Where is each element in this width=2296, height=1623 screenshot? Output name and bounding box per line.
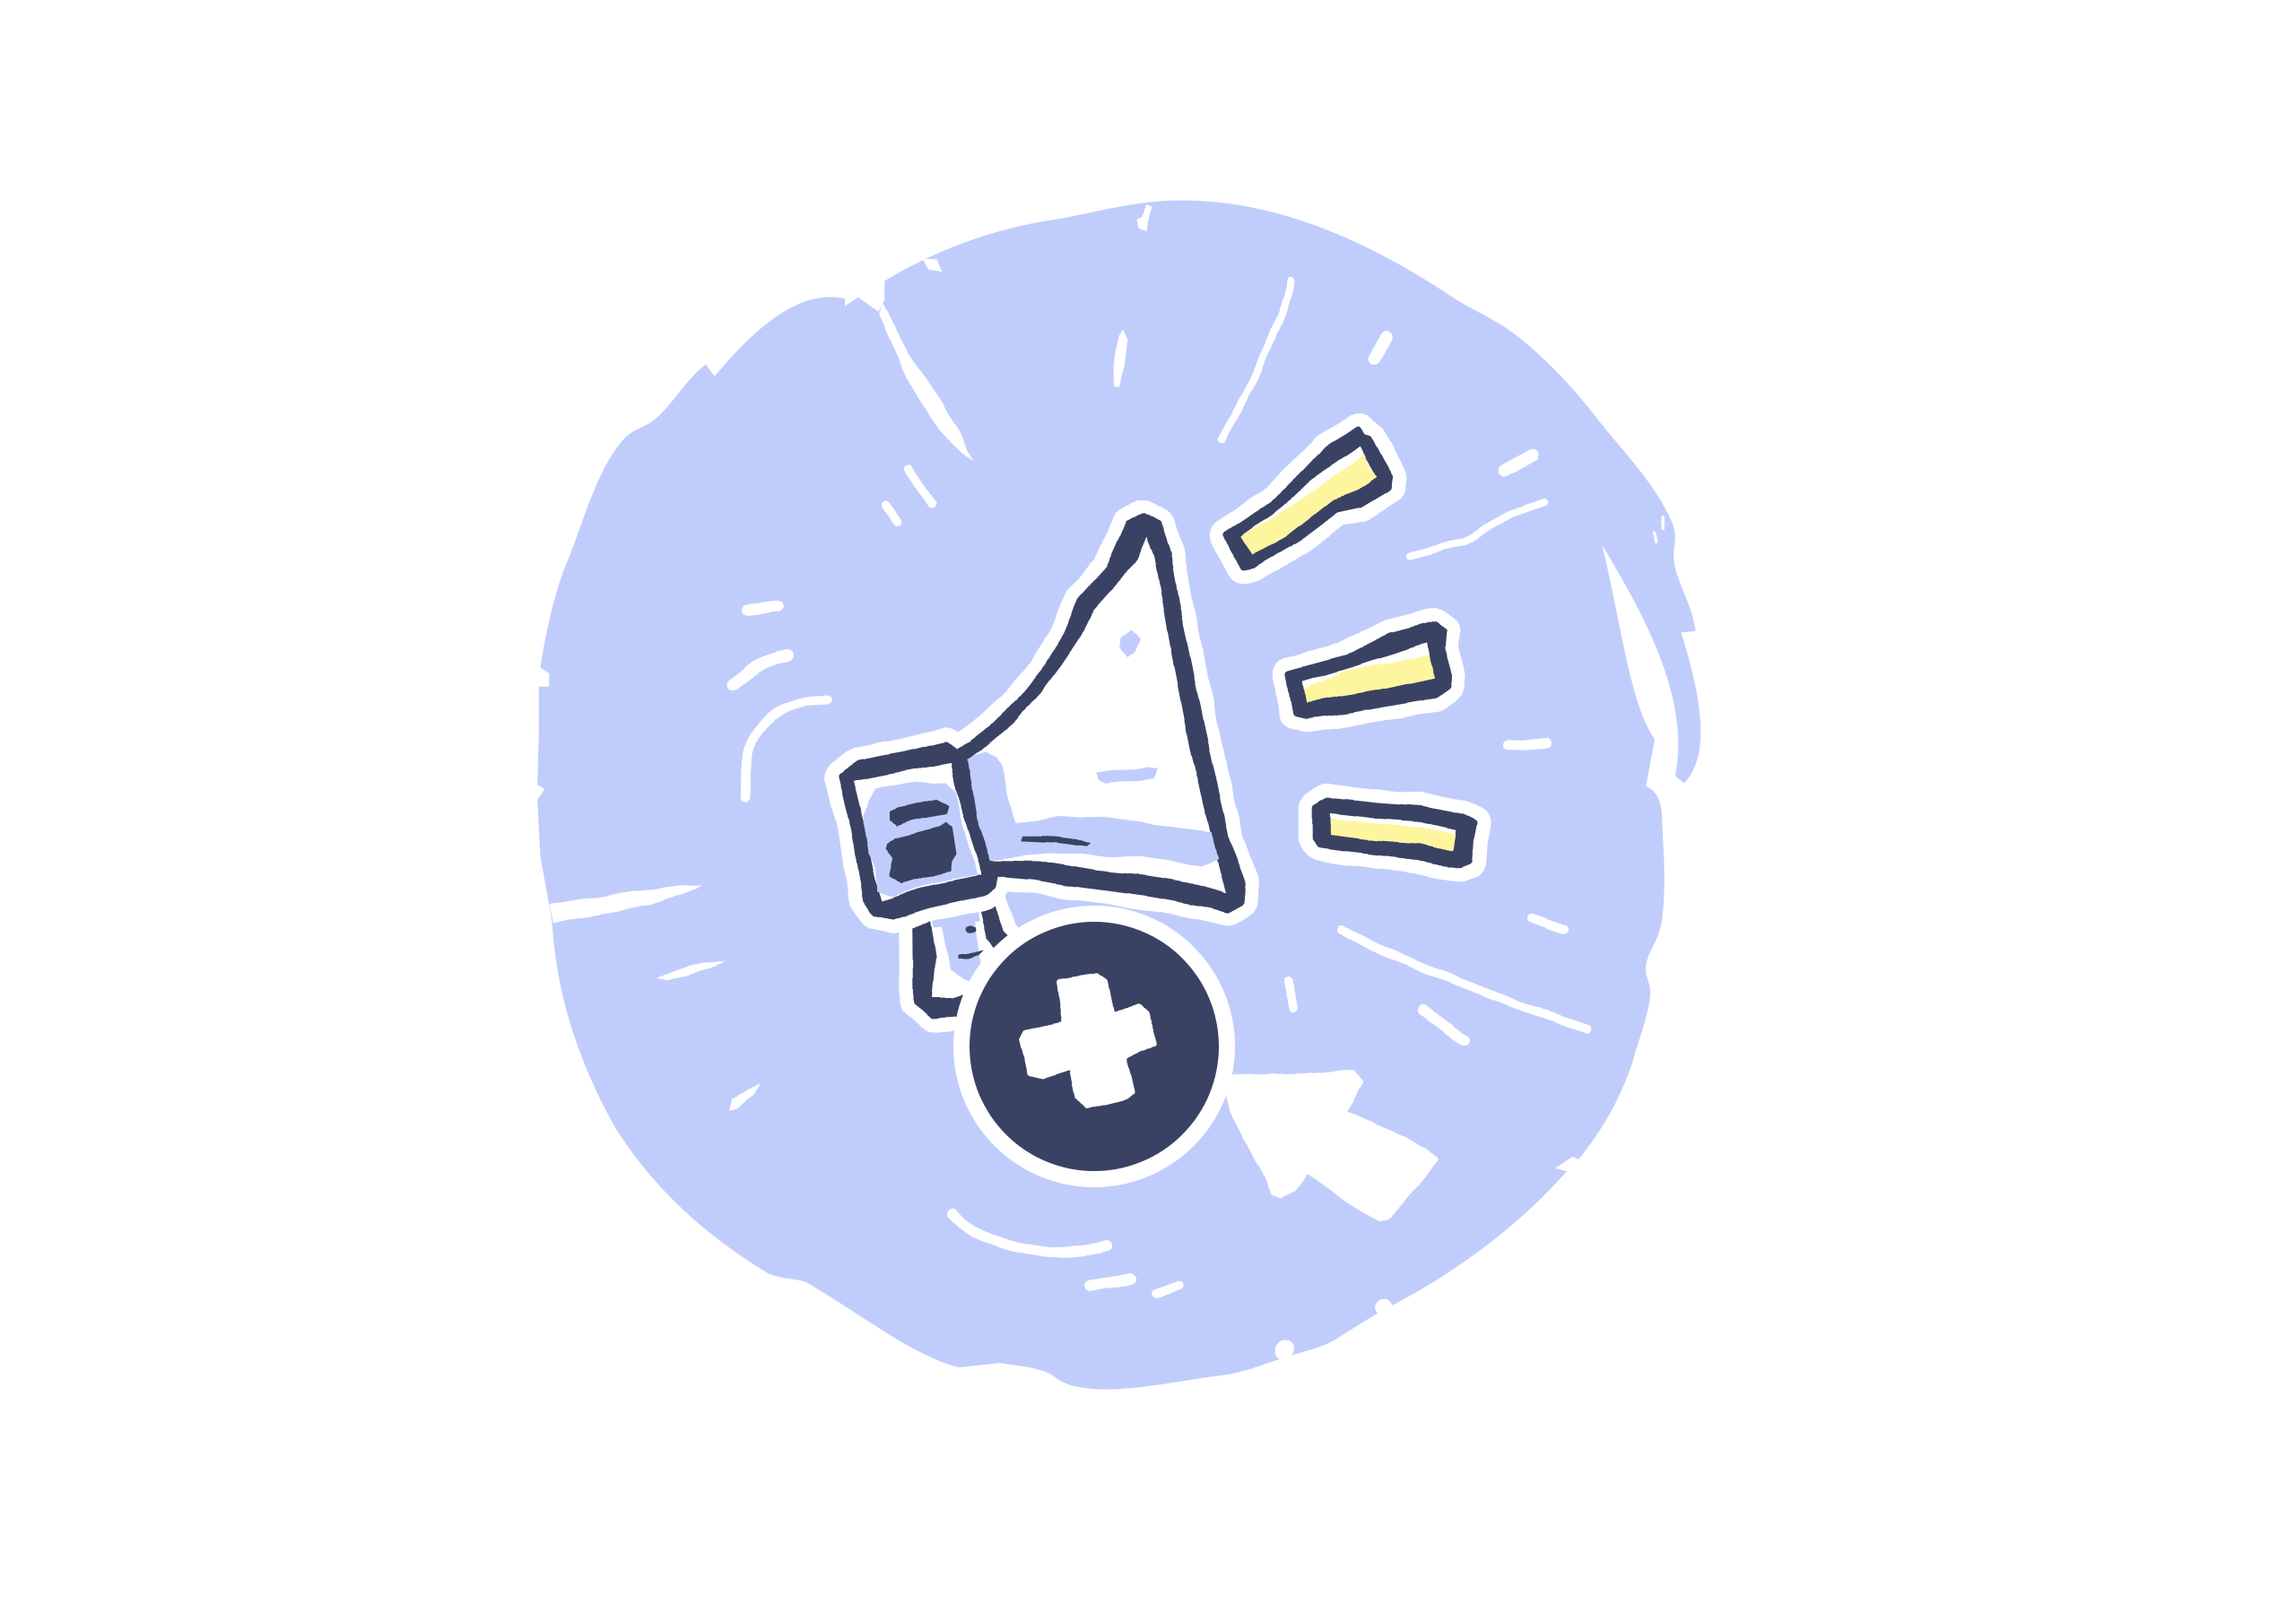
bar: top bbox=[1227, 430, 1390, 566]
cursor arrow bbox=[1228, 1073, 1435, 1219]
hand-drawn megaphone scene bbox=[549, 205, 1664, 1360]
plus badge circle bbox=[953, 906, 1235, 1187]
background sparkle strokes bbox=[549, 205, 1664, 1360]
horn bbox=[956, 516, 1242, 909]
plus sign bbox=[1022, 976, 1155, 1107]
bar: bottom bbox=[1316, 801, 1474, 864]
bar: middle bbox=[1289, 625, 1448, 716]
background blob bbox=[537, 201, 1700, 1389]
megaphone handle bbox=[916, 892, 1015, 1015]
announcement bars bbox=[1227, 430, 1474, 864]
megaphone body bbox=[842, 516, 1242, 916]
grip panel bbox=[842, 745, 995, 916]
plus sign and cursor arrow bbox=[1022, 976, 1435, 1219]
